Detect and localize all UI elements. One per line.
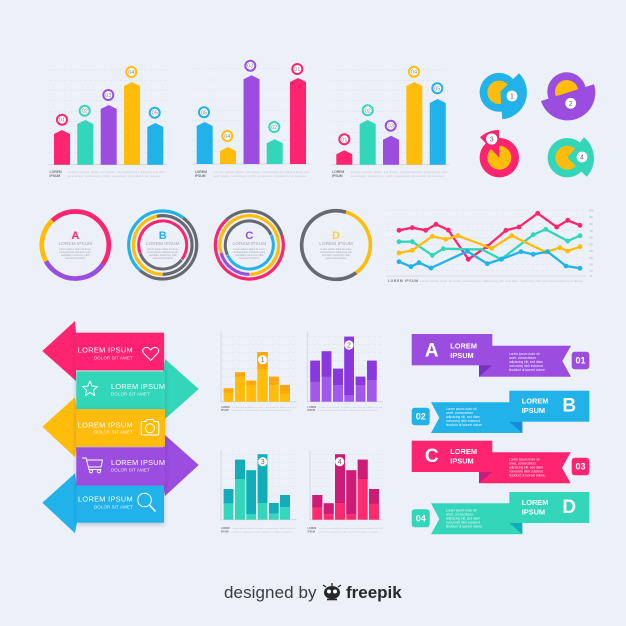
caption — [50, 170, 166, 178]
panel: ribbon C: IPSUM — [450, 456, 474, 466]
caption: sed diam nonummy nibh euismod tincidunt ut laoree. — [68, 174, 162, 178]
panel: ring D: D — [332, 230, 340, 242]
panel: column chart 2 — [193, 61, 310, 178]
panel: ribbon C: adipiscing elit, sed diam — [509, 466, 543, 470]
axis labels: 40 — [589, 249, 593, 253]
badge 1: 1 — [261, 357, 265, 364]
panel: ring B: LOREM IPSUM — [146, 241, 179, 247]
panel: ring C: Lorem ipsum dolor sit amet, — [233, 247, 266, 251]
footer: designed by freepik: freepik — [346, 583, 402, 602]
panel: ribbon A: amet, consectetuer — [509, 356, 537, 360]
number badges: 05 — [434, 86, 440, 92]
panel: ribbon B: nonummy nibh euismod — [446, 419, 480, 423]
panel: ribbon C: amet, consectetuer — [509, 462, 537, 466]
icon: freepik mascot — [323, 583, 341, 600]
yellow series — [397, 233, 582, 255]
badge 04: 04 — [416, 513, 426, 523]
panel: ribbon C: nonummy nibh euismod — [509, 470, 543, 474]
line chart caption: LOREM IPSUM — [388, 279, 418, 283]
caption: sed diam nonummy nibh euismod tincidunt ut laoree. — [319, 530, 379, 533]
pink series — [397, 211, 582, 262]
icon: pie 3: 3 — [490, 136, 494, 144]
panel: ring B: consectetuer adipiscing elit, — [147, 250, 179, 254]
caption: Lorem ipsum dolor sit amet, consectetuer adipiscing elit, — [319, 406, 383, 409]
bars — [197, 75, 306, 164]
footer: designed by freepik: designed by — [224, 583, 317, 602]
panel: ribbon B — [412, 391, 589, 433]
panel: stacked arrow list — [42, 321, 199, 533]
number badges: 04 — [224, 134, 230, 140]
icon: pie 4 — [548, 137, 594, 177]
axis labels: 20 — [589, 262, 593, 266]
panel: ring A: consectetuer adipiscing elit, — [59, 250, 92, 254]
arrow 5: magnifier — [76, 486, 164, 523]
icon: pie 2: 2 — [569, 101, 573, 108]
panel: ribbon B: Lorem ipsum dolor sit — [446, 407, 477, 411]
arrow 2: star: DOLOR SIT AMET — [111, 392, 150, 397]
caption: LOREM — [308, 527, 316, 530]
number badges: 05 — [152, 111, 158, 117]
panel: ring C — [201, 197, 297, 293]
caption: IPSUM — [195, 174, 206, 178]
panel: ribbon D — [412, 492, 589, 534]
arrow 5: magnifier: DOLOR SIT AMET — [94, 504, 133, 509]
number badges: 04 — [128, 70, 134, 76]
number badges: 04 — [411, 70, 417, 76]
caption: LOREM — [221, 527, 230, 530]
caption: Lorem ipsum dolor sit amet, consectetuer adipiscing elit, — [213, 170, 310, 174]
number badges — [57, 67, 160, 125]
panel: ring C: euismod tincidunt — [239, 256, 260, 260]
panel: ring C: LOREM IPSUM — [233, 241, 266, 247]
bars — [312, 454, 379, 520]
panel: column chart 1 — [49, 67, 167, 178]
panel: ring B: Lorem ipsum dolor sit amet, — [147, 247, 179, 251]
icon: cart — [82, 458, 102, 473]
arrow 3: camera — [76, 409, 165, 447]
caption: Lorem ipsum dolor sit amet, consectetuer adipiscing elit, — [232, 527, 297, 530]
panel: ring B: euismod tincidunt — [153, 256, 173, 260]
axis labels: 70 — [589, 229, 593, 233]
bars — [224, 352, 290, 402]
caption — [221, 527, 297, 533]
panel: ring A — [28, 198, 123, 292]
caption: IPSUM — [308, 409, 315, 412]
number badges: 03 — [247, 64, 253, 70]
panel: ring C: C — [245, 230, 253, 242]
panel: ring C: consectetuer adipiscing elit, — [233, 250, 266, 254]
caption: LOREM — [50, 170, 62, 174]
panel: ribbon D: tincidunt ut laoreet dolore. — [446, 524, 483, 528]
caption: LOREM — [195, 170, 207, 174]
caption — [308, 406, 383, 412]
panel: ribbon B: tincidunt ut laoreet dolore. — [446, 423, 483, 427]
badge 01: 01 — [575, 356, 586, 366]
panel: ribbon A: IPSUM — [450, 351, 474, 360]
badge 2: 2 — [347, 342, 351, 349]
caption — [308, 527, 383, 533]
panel: ribbon A: Lorem ipsum dolor sit — [509, 352, 540, 356]
panel: ribbon D: adipiscing elit, sed diam — [446, 516, 480, 520]
caption: IPSUM — [308, 530, 315, 533]
number badges: 02 — [82, 109, 88, 115]
icon: pie 3 — [480, 130, 519, 177]
panel: ribbon B: amet, consectetuer — [446, 411, 474, 415]
badge 03 — [572, 458, 589, 475]
caption: Lorem ipsum dolor sit amet, consectetuer adipiscing elit, — [319, 527, 383, 530]
bars — [310, 337, 377, 402]
bars — [54, 82, 163, 165]
axis labels: 60 — [589, 236, 593, 240]
panel: ribbon C: tincidunt ut laoreet dolore. — [509, 474, 546, 478]
badge 02: 02 — [416, 412, 426, 422]
panel: ribbon B: adipiscing elit, sed diam — [446, 415, 480, 419]
caption: Lorem ipsum dolor sit amet, consectetuer adipiscing elit, — [351, 170, 449, 174]
panel: ring D — [288, 197, 384, 293]
arrow 4: cart: DOLOR SIT AMET — [111, 468, 150, 473]
number badges: 03 — [388, 124, 394, 130]
icon: magnifier — [138, 493, 155, 511]
badge 02 — [412, 408, 430, 425]
panel: ring D: Lorem ipsum dolor sit amet, — [320, 247, 352, 251]
caption: sed diam nonummy nibh euismod tincidunt ut laoree. — [351, 174, 445, 178]
caption: sed diam nonummy nibh euismod tincidunt ut laoree. — [232, 530, 293, 533]
arrow 5: magnifier: LOREM IPSUM — [78, 495, 133, 504]
panel: ribbon A: A — [425, 340, 439, 362]
arrow 1: heart: DOLOR SIT AMET — [94, 355, 133, 360]
number badges: 03 — [105, 93, 111, 99]
panel: ring A: A — [71, 230, 79, 242]
panel: ribbon A: tincidunt ut laoreet dolore. — [509, 368, 546, 372]
icon: pie 1 — [480, 73, 527, 119]
panel: ribbon C: C — [425, 446, 439, 467]
icon: heart — [143, 347, 159, 360]
caption: Lorem ipsum dolor sit amet, consectetuer adipiscing elit, — [232, 406, 297, 409]
caption: Lorem ipsum dolor sit amet, consectetuer adipiscing elit, — [68, 170, 166, 174]
panel: ribbon A — [412, 334, 589, 377]
caption: LOREM — [221, 406, 230, 409]
bars — [224, 454, 290, 520]
caption: sed diam nonummy nibh euismod tincidunt ut laoree. — [213, 174, 307, 178]
arrow 3: camera: LOREM IPSUM — [78, 420, 133, 429]
panel: layered bars 4 — [308, 450, 383, 533]
axis labels: 100 — [588, 208, 594, 212]
caption — [221, 406, 297, 412]
panel: ribbon C: Lorem ipsum dolor sit — [509, 458, 540, 462]
arrow 3: camera: DOLOR SIT AMET — [94, 430, 133, 435]
caption: IPSUM — [221, 530, 229, 533]
axis labels: 80 — [589, 222, 593, 226]
icon: pie 2 — [541, 72, 595, 120]
blue series — [397, 249, 582, 271]
panel: ribbon A: nonummy nibh euismod — [509, 364, 543, 368]
caption: sed diam nonummy nibh euismod tincidunt ut laoree. — [319, 409, 379, 412]
axis labels: 90 — [589, 215, 593, 219]
caption: sed diam nonummy nibh euismod tincidunt ut laoree. — [232, 409, 293, 412]
arrow heads — [42, 321, 199, 533]
number badges: 05 — [201, 110, 207, 116]
teal series — [397, 227, 582, 262]
panel: ribbon D: IPSUM — [522, 507, 545, 516]
icon: camera — [141, 420, 159, 435]
arrow 4: cart: LOREM IPSUM — [111, 458, 165, 467]
badge 03: 03 — [575, 462, 586, 472]
panel: ring D: LOREM IPSUM — [319, 241, 353, 247]
caption: IPSUM — [50, 174, 60, 178]
arrow 2: star — [76, 372, 165, 409]
arrow 2: star: LOREM IPSUM — [111, 382, 165, 391]
panel: ring D: sed diam nonummy nibh — [322, 253, 351, 257]
axis labels: 30 — [589, 256, 593, 260]
caption: IPSUM — [221, 409, 229, 412]
caption: LOREM — [332, 170, 344, 174]
panel: ribbon D: LOREM — [522, 498, 548, 507]
panel: ring A: LOREM IPSUM — [59, 241, 92, 247]
panel: ribbon B: IPSUM — [522, 406, 545, 415]
caption: IPSUM — [332, 174, 343, 178]
caption — [195, 170, 310, 178]
panel: ribbon C — [412, 441, 589, 483]
panel: ring B: sed diam nonummy nibh — [149, 253, 177, 257]
number badges: 01 — [341, 137, 347, 143]
line chart — [386, 208, 594, 283]
icon: pie 1: 1 — [510, 94, 514, 100]
panel: ribbon D: Lorem ipsum dolor sit — [446, 508, 477, 512]
line chart caption: Lorem ipsum dolor sit amet, consectetuer adipiscing elit, sed diam nonummy nibh euismod tincidunt ut laoree — [420, 279, 583, 283]
arrow 1: heart: LOREM IPSUM — [78, 346, 133, 355]
axis labels — [588, 208, 594, 278]
badge 01 — [572, 352, 589, 369]
number badges — [199, 61, 302, 141]
badge 4: 4 — [338, 459, 342, 466]
icon: star — [82, 381, 98, 396]
panel: layered bars 3 — [221, 450, 297, 533]
arrow 4: cart — [76, 447, 165, 486]
panel: ring D: euismod tincidunt — [326, 256, 346, 260]
number badges: 01 — [59, 118, 65, 124]
panel: ribbon B: B — [562, 396, 576, 416]
badge 3: 3 — [261, 459, 265, 466]
panel: ribbon D: amet, consectetuer — [446, 512, 474, 516]
arrow 1: heart — [76, 333, 164, 370]
panel: ring A: sed diam nonummy nibh — [61, 253, 90, 257]
axis labels: 50 — [589, 242, 593, 246]
caption: LOREM — [308, 406, 316, 409]
number badges: 02 — [365, 108, 371, 114]
panel: ribbon A: LOREM — [450, 342, 477, 350]
number badges — [339, 67, 442, 144]
panel: ring A: Lorem ipsum dolor sit amet, — [59, 247, 92, 251]
panel: column chart 3 — [332, 67, 449, 178]
axis labels: 10 — [589, 268, 593, 272]
number badges: 01 — [294, 67, 300, 73]
bars — [336, 82, 446, 165]
footer: designed by freepik — [224, 583, 402, 602]
panel: layered bars 1 — [221, 332, 297, 412]
panel: ring D: consectetuer adipiscing elit, — [320, 250, 352, 254]
icon: pie 4: 4 — [580, 154, 584, 162]
panel: ring B: B — [159, 230, 167, 242]
panel: ring A: euismod tincidunt — [65, 256, 86, 260]
panel: ribbon C: LOREM — [450, 447, 477, 456]
panel: ribbon D: D — [562, 497, 576, 518]
number badges: 02 — [271, 125, 277, 131]
panel: ring B — [115, 197, 211, 293]
caption — [332, 170, 449, 178]
panel: ring C: sed diam nonummy nibh — [235, 253, 264, 257]
panel: ribbon B: LOREM — [522, 396, 548, 406]
badge 04 — [412, 509, 430, 527]
axis labels: 0 — [590, 274, 592, 278]
panel: ribbon A: adipiscing elit, sed diam — [509, 360, 543, 364]
panel: ribbon D: nonummy nibh euismod — [446, 520, 480, 524]
panel: layered bars 2 — [307, 332, 383, 412]
